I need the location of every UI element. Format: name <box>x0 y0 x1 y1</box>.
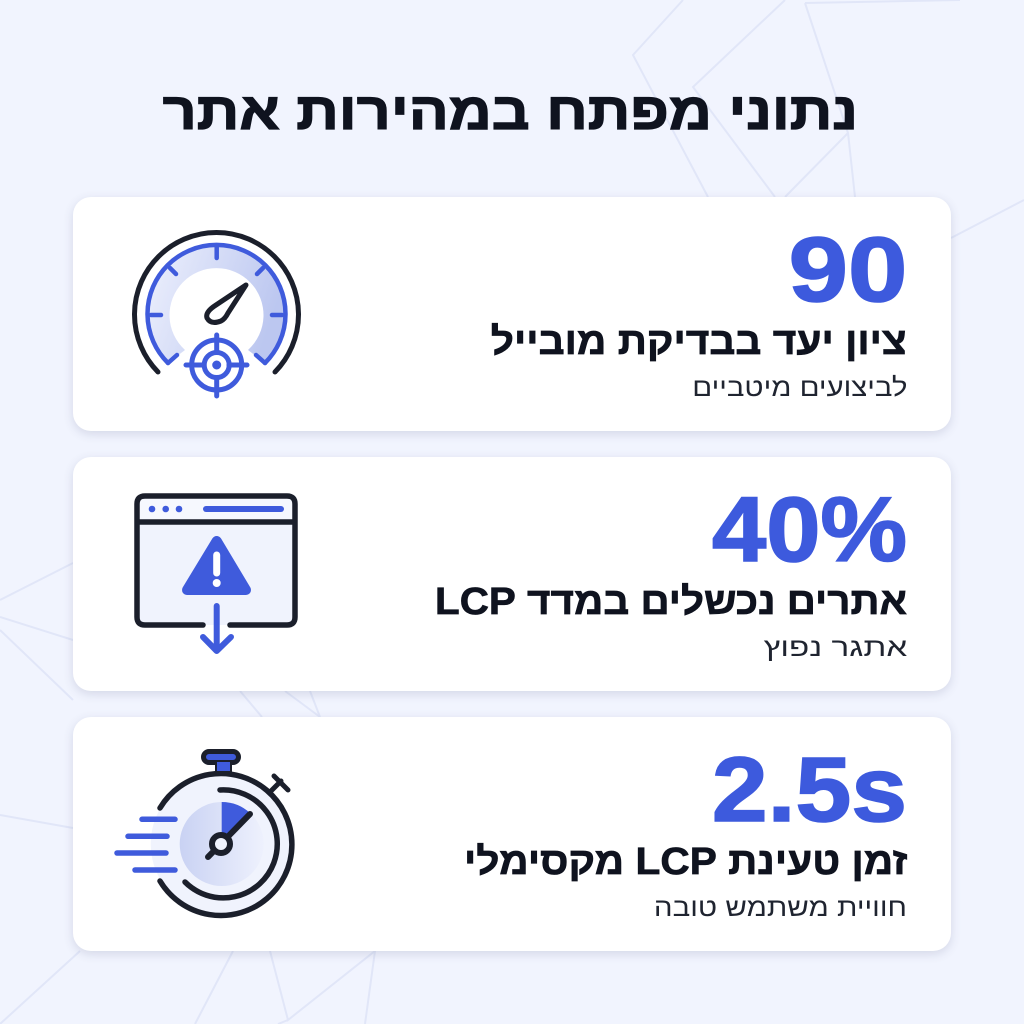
heading: failing sites: אתרים נכשלים במדד LCP <box>435 581 907 623</box>
text: common challenge: אתגר נפוץ <box>763 632 907 662</box>
panel: LCP failures <box>73 457 951 691</box>
stat: 2.5s: 2.5s <box>712 739 907 841</box>
stat: 40%: 40% <box>712 479 907 581</box>
stat: 90: 90 <box>788 219 907 321</box>
text: optimal performance: לביצועים מיטביים <box>692 372 907 402</box>
heading: mobile target: ציון יעד בבדיקת מובייל <box>491 321 907 363</box>
panel: mobile score <box>73 197 951 431</box>
heading: max LCP time: זמן טעינת LCP מקסימלי <box>464 841 907 883</box>
panel: max LCP load time <box>73 717 951 951</box>
title: נתוני מפתח במהירות אתר <box>163 83 858 141</box>
text: good user experience: חוויית משתמש טובה <box>654 892 907 922</box>
